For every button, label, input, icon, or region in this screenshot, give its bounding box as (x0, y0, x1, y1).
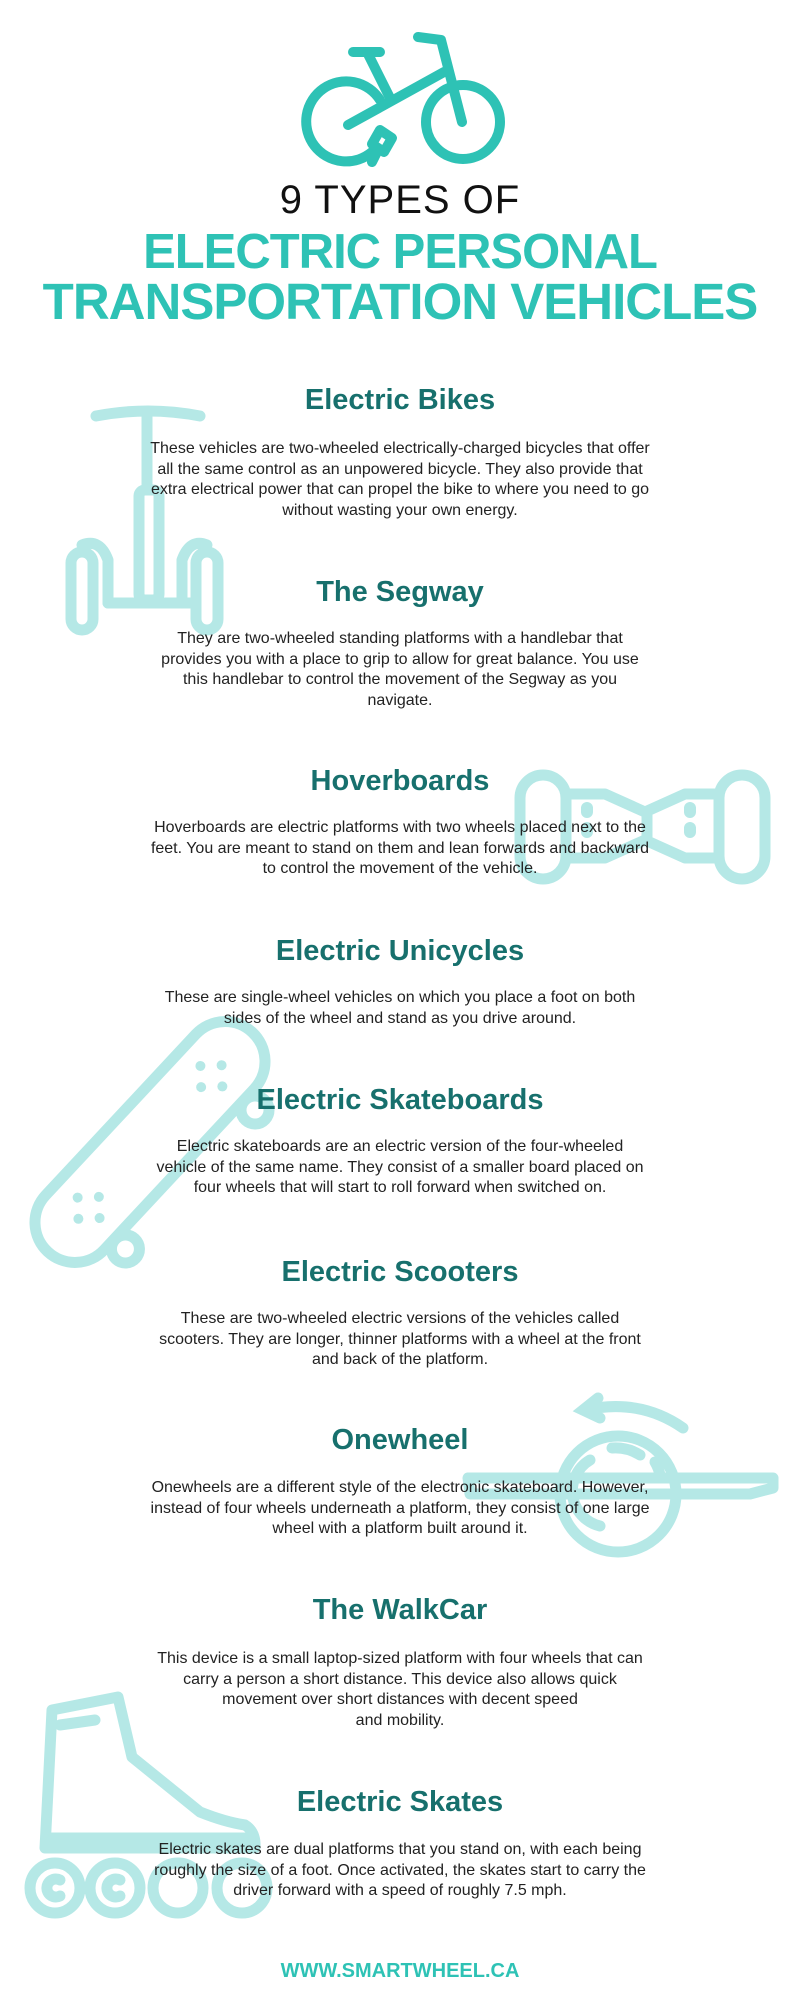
text: electric bikes: These vehicles are two-wheeled electrically-charged bicycles that offer all the same control as an unpowered bicycle. They also provide that extra electrical power that can propel the bike to where you need to go without wasting your own energy. (150, 440, 650, 518)
text: hoverboards: Hoverboards are electric platforms with two wheels placed next to the feet. You are meant to stand on them and lean forwards and backward to control the movement of the vehicle. (151, 819, 649, 877)
heading: segway: The Segway (316, 576, 484, 608)
title: TRANSPORTATION VEHICLES (43, 273, 757, 330)
text: scooters: These are two-wheeled electric versions of the vehicles called scooters. They are longer, thinner platforms with a wheel at the front and back of the platform. (159, 1310, 641, 1368)
title: 9 TYPES OF (280, 178, 520, 222)
heading: walkcar: The WalkCar (313, 1594, 487, 1626)
heading: scooters: Electric Scooters (282, 1256, 518, 1288)
heading: onewheel: Onewheel (332, 1424, 468, 1456)
text: segway: They are two-wheeled standing platforms with a handlebar that provides you with a place to grip to allow for great balance. You use this handlebar to control the movement of the Segway as you navigate. (161, 630, 639, 708)
text: skates: Electric skates are dual platforms that you stand on, with each being roughly the size of a foot. Once activated, the skates start to carry the driver forward with a speed of roughly 7.5 mph. (154, 1841, 646, 1899)
title: ELECTRIC PERSONAL (143, 225, 657, 279)
heading: unicycles: Electric Unicycles (276, 935, 524, 967)
heading: hoverboards: Hoverboards (311, 765, 489, 797)
heading: electric bikes: Electric Bikes (305, 384, 495, 416)
text: walkcar: and mobility. (356, 1712, 444, 1728)
title (43, 178, 757, 330)
heading: skateboards: Electric Skateboards (257, 1084, 543, 1116)
text: walkcar: This device is a small laptop-sized platform with four wheels that can carry a person a short distance. This device also allows quick movement over short distances with decent speed (157, 1650, 643, 1708)
text: unicycles: These are single-wheel vehicles on which you place a foot on both sides of the wheel and stand as you drive around. (165, 989, 635, 1026)
text: onewheel: Onewheels are a different style of the electronic skateboard. However, instead of four wheels underneath a platform, they consist of one large wheel with a platform built around it. (151, 1479, 649, 1537)
heading: skates: Electric Skates (297, 1786, 503, 1818)
text: skateboards: Electric skateboards are an electric version of the four-wheeled vehicle of the same name. They consist of a smaller board placed on four wheels that will start to roll forward when switched on. (156, 1138, 644, 1196)
footer url: WWW.SMARTWHEEL.CA (281, 1960, 519, 1982)
